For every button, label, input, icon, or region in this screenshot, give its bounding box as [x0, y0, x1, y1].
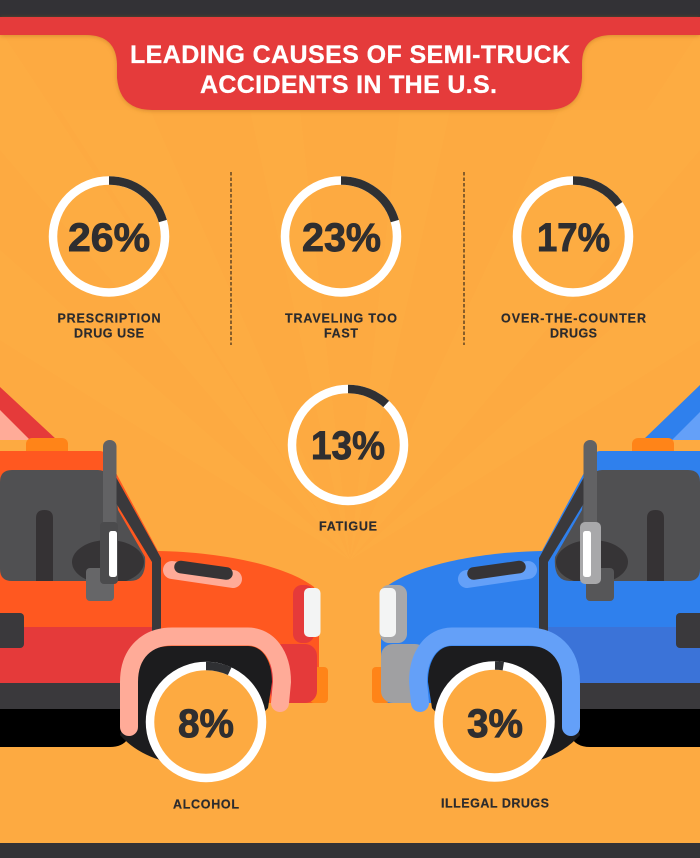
value: 3%: [467, 702, 523, 746]
stat: 3% illegal drugs: [438, 666, 550, 810]
stat: 17% over-the-counter drugs: [501, 180, 646, 340]
headlight: [380, 585, 407, 643]
divider: right: [463, 172, 465, 345]
sunburst rays: [0, 30, 700, 560]
value: 26%: [68, 216, 150, 260]
lower cab band: [0, 627, 152, 683]
ring: [53, 180, 165, 292]
stat: 17% over-the-counter drugs: DRUGS: [550, 326, 597, 340]
door handle: [676, 613, 700, 648]
trailer panel: [0, 410, 30, 440]
arc: [495, 661, 503, 670]
bottom dark bar: [0, 843, 700, 858]
cab and hood: [0, 451, 319, 703]
label: ILLEGAL DRUGS: [441, 796, 549, 810]
lower cab band: [548, 627, 700, 683]
cab light: [632, 438, 674, 458]
arc: [348, 389, 386, 404]
title banner: [0, 17, 700, 110]
trailer stripe: [643, 385, 700, 440]
door handle: [0, 613, 24, 648]
label: TRAVELING TOO: [285, 312, 397, 326]
cab and hood: [381, 451, 700, 703]
blue semi-truck: [372, 385, 700, 762]
red semi-truck: [0, 387, 328, 762]
stat: 8% alcohol: [150, 666, 262, 812]
stat: 26% prescription drug use: DRUG USE: [74, 326, 144, 340]
cab light: [26, 438, 68, 458]
label: FATIGUE: [319, 520, 377, 534]
label: OVER-THE-COUNTER: [501, 312, 646, 326]
hood vent: [172, 567, 233, 579]
ring: [438, 666, 550, 778]
arc: [341, 180, 395, 221]
seat: [36, 510, 53, 581]
top dark bar: [0, 0, 700, 17]
mirror: [580, 440, 614, 601]
label: PRESCRIPTION: [58, 312, 160, 326]
bumper: [270, 644, 328, 703]
side step dark: [0, 683, 130, 709]
ring: [285, 180, 397, 292]
value: 23%: [302, 216, 381, 260]
divider: left: [230, 172, 232, 345]
ring: [150, 666, 262, 778]
stat: 23% traveling too fast: [285, 180, 397, 340]
headlight: [293, 585, 320, 643]
title: LEADING CAUSES OF SEMI-TRUCK: [130, 41, 570, 69]
label: ALCOHOL: [173, 798, 239, 812]
ring: [517, 180, 629, 292]
seat: [647, 510, 664, 581]
door pillar: [116, 477, 161, 632]
title: ACCIDENTS IN THE U.S.: [200, 71, 497, 99]
bumper: [372, 644, 427, 703]
arc: [206, 666, 230, 671]
title: [130, 41, 570, 99]
trailer stripe: [0, 387, 57, 440]
stat: 13% fatigue: [292, 389, 404, 534]
ring: [292, 389, 404, 501]
steering wheel: [556, 540, 628, 584]
mirror: [86, 440, 118, 601]
hood vent: [467, 567, 528, 579]
side step dark: [570, 683, 700, 709]
door pillar: [539, 477, 584, 632]
value: 17%: [537, 216, 610, 260]
side step black: [570, 709, 700, 747]
stat: 26% prescription drug use: [53, 180, 165, 340]
steering wheel: [72, 540, 144, 584]
wheel arch and tire: [428, 646, 580, 762]
window: [0, 470, 145, 581]
value: 8%: [178, 702, 234, 746]
value: 13%: [311, 424, 385, 468]
arc: [573, 180, 619, 204]
trailer panel: [672, 412, 700, 440]
stat: 23% traveling too fast: FAST: [324, 326, 358, 340]
fender: [418, 636, 571, 727]
arc: [109, 180, 163, 221]
fender: [129, 636, 282, 727]
window: [555, 470, 700, 581]
side step black: [0, 709, 130, 747]
wheel arch and tire: [120, 646, 272, 762]
